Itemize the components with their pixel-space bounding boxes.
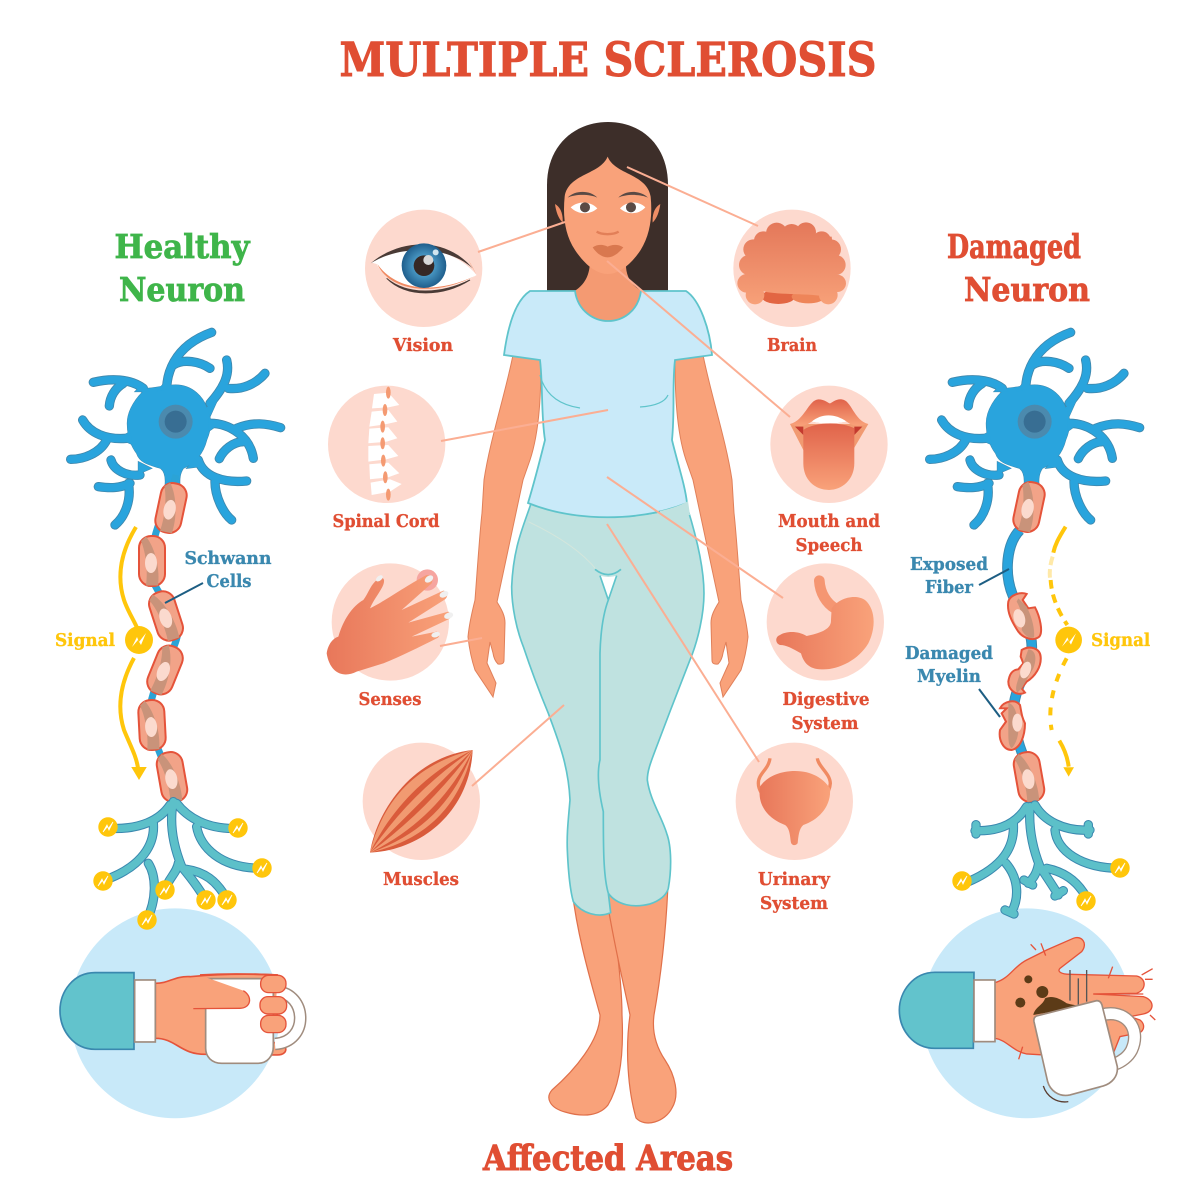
label: digestive system	[782, 689, 870, 734]
panel: muscles	[363, 743, 480, 860]
leggings	[512, 502, 704, 915]
label: mouth and speech: Speech	[796, 535, 862, 556]
damaged axon with exposed fiber	[1008, 530, 1032, 763]
label: vision: Vision	[392, 335, 453, 356]
damaged signal arrow: Signal	[1091, 630, 1150, 651]
icon: bladder	[758, 758, 830, 845]
left leg skin and foot	[549, 890, 622, 1115]
schwann cells label: Cells	[206, 571, 252, 592]
caption: affected areas: Affected Areas	[482, 1138, 733, 1179]
label: digestive system: System	[792, 713, 858, 734]
icon: stomach	[776, 581, 874, 669]
schwann cells	[138, 481, 189, 804]
damaged hand dropping mug	[899, 908, 1155, 1118]
damaged myelin cells	[1000, 480, 1047, 804]
neck	[573, 260, 643, 322]
exposed fiber label: Exposed	[910, 554, 988, 575]
label: urinary system: Urinary	[758, 869, 831, 890]
icon: brain	[737, 222, 846, 304]
damaged myelin label: Myelin	[917, 666, 981, 687]
label: muscles: Muscles	[383, 869, 459, 890]
healthy synapse signals	[93, 817, 272, 930]
exposed fiber label	[910, 554, 1009, 598]
exposed fiber label: Fiber	[925, 577, 973, 598]
healthy neuron cell body and dendrites	[71, 332, 281, 525]
panel: senses	[327, 563, 454, 681]
panel: vision	[365, 210, 482, 327]
damaged synapse signals	[952, 858, 1130, 911]
healthy signal arrow: Signal	[55, 630, 115, 651]
face	[555, 157, 660, 274]
connector lines	[440, 167, 790, 786]
panel: mouth and speech	[770, 386, 888, 503]
label: senses: Senses	[358, 689, 422, 710]
shirt folds and hem overlay	[540, 375, 690, 518]
schwann cells label	[165, 548, 272, 603]
body: hair, face, shirt, leggings	[468, 122, 748, 1123]
damaged signal arrow	[1050, 527, 1150, 777]
panel: digestive system	[767, 563, 884, 681]
label: urinary system: System	[760, 893, 828, 914]
label: mouth and speech: Mouth and	[778, 511, 880, 532]
shirt	[504, 291, 712, 517]
panel: brain	[733, 210, 851, 327]
damaged myelin label: Damaged	[905, 643, 993, 664]
title: MULTIPLE SCLEROSIS	[340, 33, 876, 88]
icon: muscle	[370, 750, 473, 853]
right arm	[675, 355, 748, 697]
heading: healthy neuron	[114, 227, 250, 309]
healthy axon	[150, 475, 178, 800]
heading: healthy neuron: Healthy	[114, 227, 250, 266]
damaged axon terminals	[968, 805, 1121, 914]
heading: healthy neuron: Neuron	[119, 270, 245, 309]
right leg skin and foot	[606, 885, 676, 1123]
heading: damaged neuron: Damaged	[947, 227, 1081, 266]
icon: mouth and tongue	[790, 399, 868, 490]
icon: spine	[368, 387, 402, 501]
healthy hand holding mug	[60, 908, 300, 1118]
left arm	[468, 355, 541, 697]
healthy axon terminals	[103, 802, 262, 920]
heading: damaged neuron: Neuron	[964, 270, 1090, 309]
schwann cells label: Schwann	[184, 548, 272, 569]
label: brain: Brain	[767, 335, 817, 356]
healthy signal arrow	[55, 527, 153, 778]
panel: spinal cord	[328, 386, 445, 503]
damaged neuron cell body and dendrites	[930, 332, 1140, 525]
label: spinal cord: Spinal Cord	[332, 511, 440, 532]
heading: damaged neuron	[947, 227, 1090, 309]
icon: eye	[371, 243, 477, 293]
panel: urinary system	[736, 743, 853, 860]
damaged myelin label	[905, 643, 1000, 717]
label: digestive system: Digestive	[782, 689, 870, 710]
hair	[547, 122, 668, 292]
label: urinary system	[758, 869, 831, 914]
label: mouth and speech	[778, 511, 880, 556]
icon: hand	[327, 569, 454, 674]
